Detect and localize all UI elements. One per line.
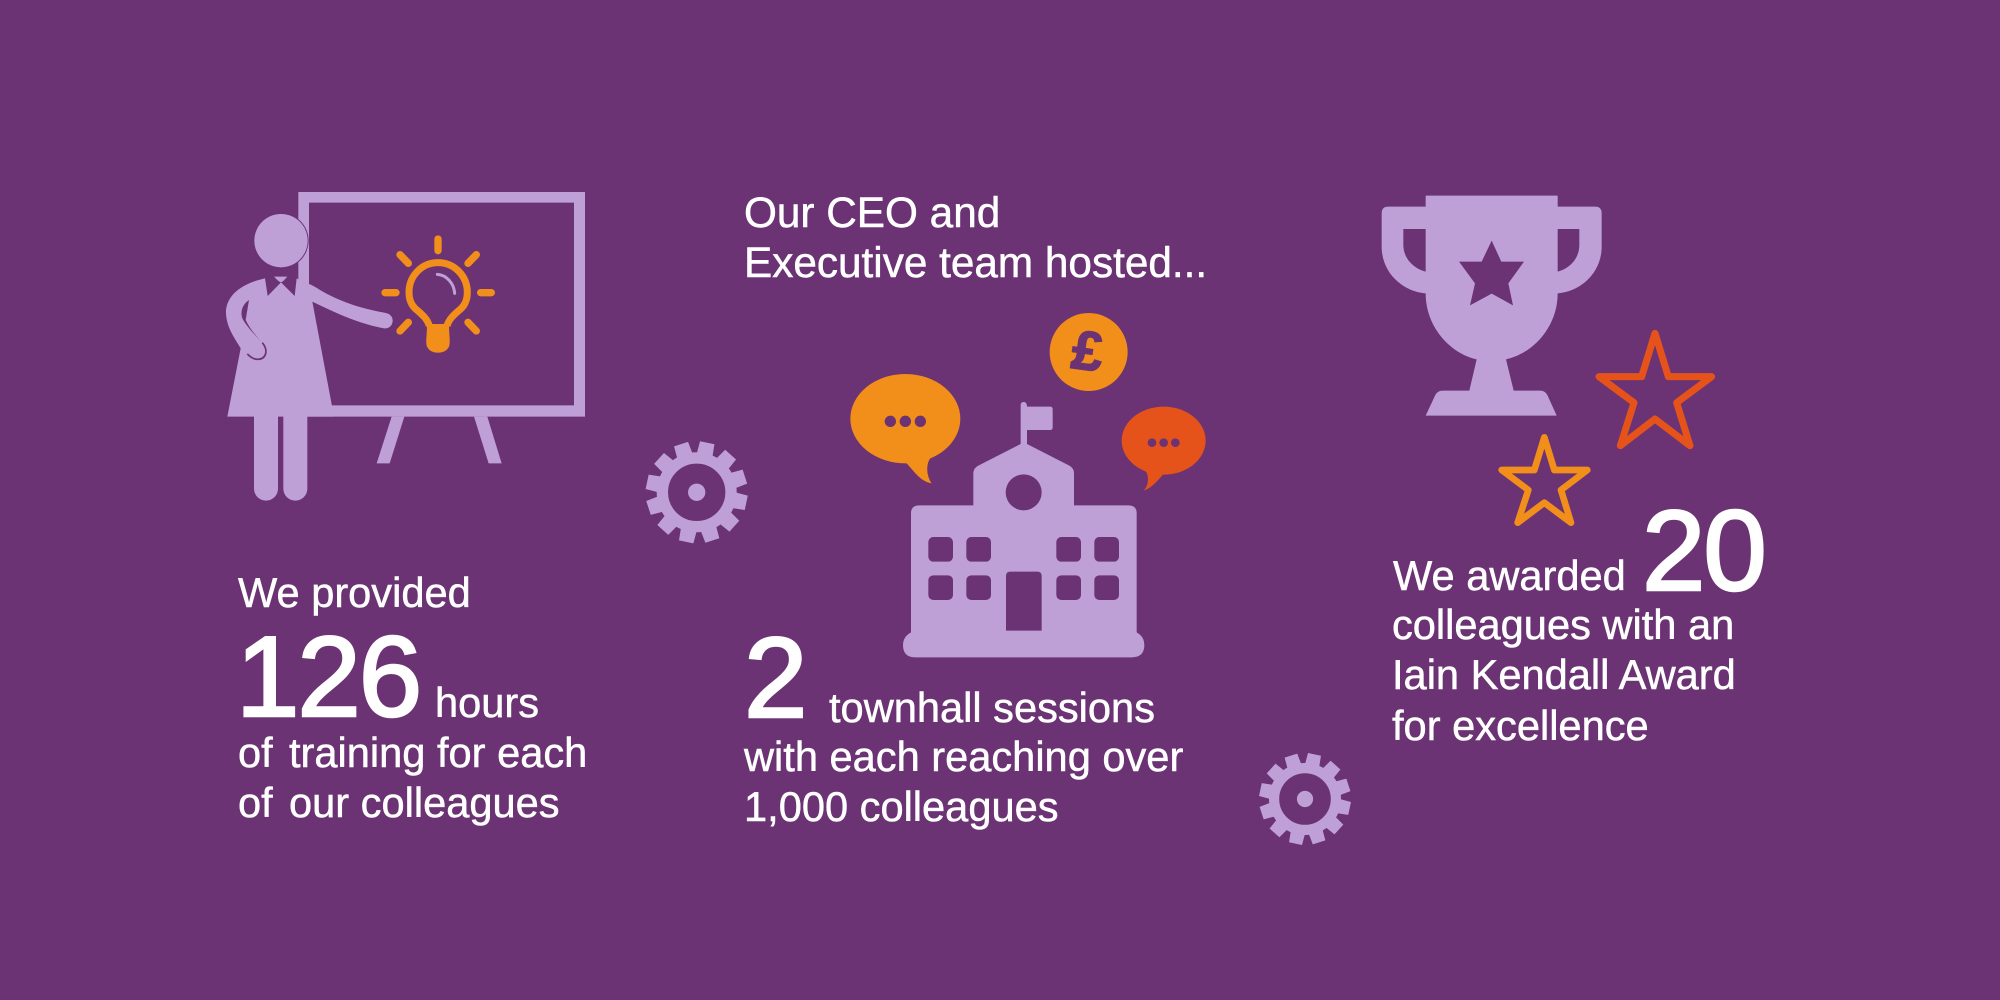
text block: awards: We awarded xyxy=(1393,552,1626,599)
text block: awards: for excellence xyxy=(1392,702,1649,749)
text block: training hours: our colleagues xyxy=(289,779,560,826)
text block: training hours: hours xyxy=(435,679,539,726)
heading: CEO and Executive team: Our CEO and xyxy=(744,189,1000,236)
text block: townhall sessions: 1,000 colleagues xyxy=(744,783,1059,830)
text block: awards: 20 xyxy=(1642,488,1765,615)
text block: awards xyxy=(1392,488,1765,749)
text block: awards: colleagues with an xyxy=(1392,601,1734,648)
icon: building xyxy=(903,402,1144,657)
text block: townhall sessions: 2 xyxy=(744,615,805,742)
text block: training hours: We provided xyxy=(238,569,471,616)
icon: light bulb xyxy=(385,239,491,353)
heading: CEO and Executive team: Executive team hosted... xyxy=(744,239,1207,286)
text block: training hours: training for each xyxy=(289,729,587,776)
icon: teacher at board with light bulb xyxy=(226,192,585,501)
icon: trophy xyxy=(1382,196,1602,416)
icon: trophy with stars xyxy=(1382,196,1712,523)
text block: training hours xyxy=(236,569,587,826)
text block: training hours: 126 xyxy=(236,614,420,741)
text block: training hours: of xyxy=(238,729,273,776)
icon: pound coin: £ xyxy=(1068,318,1107,384)
icon: woman presenter xyxy=(226,213,393,501)
text block: training hours: of xyxy=(238,779,273,826)
heading: CEO and Executive team xyxy=(744,189,1207,286)
icon: red star outline xyxy=(1599,333,1712,446)
gear: left xyxy=(645,441,748,544)
text block: awards: Iain Kendall Award xyxy=(1392,651,1736,698)
icon: orange speech bubble xyxy=(850,374,960,483)
icon: pound coin xyxy=(1050,313,1128,391)
icon: orange star outline xyxy=(1502,437,1587,523)
icon: town hall building with speech bubbles and coin xyxy=(850,313,1206,657)
text block: townhall sessions xyxy=(743,615,1183,830)
presentation board xyxy=(298,192,585,463)
gear: right xyxy=(1259,753,1351,845)
text block: townhall sessions: with each reaching over xyxy=(743,733,1183,780)
icon: red speech bubble xyxy=(1122,407,1206,491)
text block: townhall sessions: townhall sessions xyxy=(829,684,1155,731)
